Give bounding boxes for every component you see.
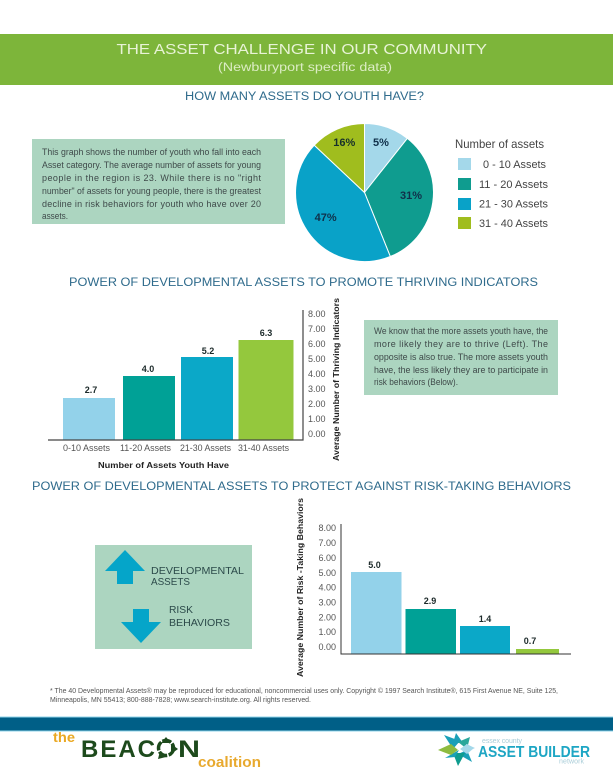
heading: risk-taking behaviors: POWER OF DEVELOPMENTAL ASSETS TO PROTECT AGAINST RISK-TAKING BEHAVIORS <box>32 481 571 493</box>
bar chart: risk-taking behaviors: Average Number of Risk -Taking Behaviors <box>295 498 305 677</box>
bar chart: thriving indicators: 8.00 <box>308 309 326 319</box>
legend: number of assets: 0 - 10 Assets <box>483 159 546 171</box>
header banner <box>0 34 613 85</box>
logo: Essex County Asset Builder Network: ASSET BUILDER <box>478 744 590 761</box>
panel: assets up, risk down <box>95 545 252 649</box>
label: risk behaviors: RISK <box>169 605 193 616</box>
icon: beacon ring <box>158 737 178 759</box>
label: risk behaviors <box>169 605 230 629</box>
panel: thriving explanation: more likely they are to thrive (Left). The <box>374 339 548 349</box>
bar chart: thriving indicators: 21-30 Assets <box>180 443 231 453</box>
panel: pie chart explanation: assets. <box>42 211 68 221</box>
label: developmental assets: DEVELOPMENTAL <box>151 566 244 577</box>
bar chart: thriving indicators: 4.0 <box>142 364 154 374</box>
panel: pie chart explanation: people in the region is 23. While there is no "right <box>42 173 261 183</box>
panel: thriving explanation: risk behaviors (Below). <box>374 377 458 387</box>
logo: the Beacon coalition <box>53 729 261 771</box>
bar chart: risk-taking behaviors: 6.00 <box>318 553 336 563</box>
footnote: copyright: Minneapolis, MN 55413; 800-888-7828; www.search-institute.org. All rights reserved. <box>50 695 311 704</box>
panel: pie chart explanation: decline in risk behaviors for youth who have over 20 <box>42 199 261 209</box>
bar chart: risk-taking behaviors: 0.00 <box>318 642 336 652</box>
legend: number of assets: Number of assets <box>455 137 544 151</box>
panel: thriving explanation: opposite is also true. The more assets youth <box>374 352 548 362</box>
logo: the Beacon coalition: BEAC <box>81 736 155 763</box>
label: developmental assets: ASSETS <box>151 577 190 588</box>
label: risk behaviors: BEHAVIORS <box>169 618 230 629</box>
bar chart: thriving indicators: 5.2 <box>202 346 214 356</box>
footnote: copyright <box>50 686 558 704</box>
bar chart: thriving indicators: 3.00 <box>308 384 326 394</box>
legend: number of assets: 11 - 20 Assets <box>479 179 548 191</box>
legend: number of assets <box>455 137 548 230</box>
panel: pie chart explanation: number" of assets for young people, there is the greatest <box>42 186 261 196</box>
footnote: copyright: * The 40 Developmental Assets® may be reproduced for educational, noncommercial uses only. Copyright © 1997 Search Institute®, 615 First Avenue NE, Suite 125, <box>50 686 558 695</box>
label: developmental assets <box>151 566 244 588</box>
heading: thriving indicators: POWER OF DEVELOPMENTAL ASSETS TO PROMOTE THRIVING INDICATORS <box>69 277 538 289</box>
bar chart: risk-taking behaviors: 3.00 <box>318 598 336 608</box>
legend: number of assets: 21 - 30 Assets <box>479 198 548 210</box>
panel: thriving explanation: have, the less likely they are to participate in <box>374 365 548 375</box>
bar chart: thriving indicators: 6.00 <box>308 339 326 349</box>
bar chart: risk-taking behaviors: 5.0 <box>368 560 381 570</box>
bar chart: thriving indicators: 7.00 <box>308 324 326 334</box>
bar chart: thriving indicators: Number of Assets Youth Have <box>98 460 229 470</box>
bar chart: thriving indicators: 0-10 Assets <box>63 443 110 453</box>
legend: number of assets: 31 - 40 Assets <box>479 218 548 230</box>
bar chart: thriving indicators: Average Number of Thriving Indicators <box>331 298 341 461</box>
logo: Essex County Asset Builder Network: essex county <box>482 738 522 745</box>
pie chart: 31% <box>400 190 422 202</box>
bar chart: thriving indicators: 2.00 <box>308 399 326 409</box>
icon: up arrow <box>105 550 145 584</box>
bar chart: risk-taking behaviors: 7.00 <box>318 538 336 548</box>
header banner: (Newburyport specific data) <box>218 62 392 74</box>
icon: down arrow <box>121 609 161 643</box>
pie chart <box>296 124 433 261</box>
bar chart: thriving indicators: 4.00 <box>308 369 326 379</box>
pie chart: 5% <box>373 137 389 149</box>
panel: pie chart explanation: Asset category. The average number of assets for young <box>42 160 261 170</box>
bar chart: thriving indicators: 31-40 Assets <box>238 443 289 453</box>
bar chart: risk-taking behaviors: 0.7 <box>524 636 536 646</box>
bar chart: thriving indicators: 2.7 <box>85 385 97 395</box>
bar chart: risk-taking behaviors: 2.9 <box>424 596 436 606</box>
panel: thriving explanation <box>364 320 558 395</box>
pie chart: 47% <box>315 212 337 224</box>
bar chart: risk-taking behaviors: 5.00 <box>318 568 336 578</box>
logo: Essex County Asset Builder Network: network <box>559 758 584 766</box>
bar chart: thriving indicators: 11-20 Assets <box>120 443 171 453</box>
bar chart: risk-taking behaviors: 1.4 <box>479 614 491 624</box>
bar chart: thriving indicators: 1.00 <box>308 414 326 424</box>
bar chart: risk-taking behaviors: 1.00 <box>318 627 336 637</box>
bar chart: thriving indicators: 0.00 <box>308 429 326 439</box>
heading: how many assets: HOW MANY ASSETS DO YOUTH HAVE? <box>185 91 424 103</box>
panel: pie chart explanation <box>32 139 285 224</box>
icon: star <box>438 733 475 766</box>
logo: the Beacon coalition: the <box>53 729 75 745</box>
bar chart: thriving indicators: 6.3 <box>260 328 272 338</box>
bar chart: thriving indicators: 5.00 <box>308 354 326 364</box>
pie chart: 16% <box>333 137 356 149</box>
bar chart: risk-taking behaviors: 4.00 <box>318 582 336 592</box>
bar chart: risk-taking behaviors: 2.00 <box>318 612 336 622</box>
bar chart: risk-taking behaviors <box>295 498 571 677</box>
logo: the Beacon coalition: N <box>178 736 200 763</box>
bar chart: risk-taking behaviors: 8.00 <box>318 523 336 533</box>
bar chart: thriving indicators <box>48 298 341 470</box>
panel: pie chart explanation: This graph shows the number of youth who fall into each <box>42 147 261 157</box>
header banner: THE ASSET CHALLENGE IN OUR COMMUNITY <box>116 42 487 58</box>
logo: Essex County Asset Builder Network <box>438 733 590 766</box>
footer band <box>0 716 613 732</box>
panel: thriving explanation: We know that the more assets youth have, the <box>374 326 548 336</box>
logo: the Beacon coalition: coalition <box>198 754 261 771</box>
